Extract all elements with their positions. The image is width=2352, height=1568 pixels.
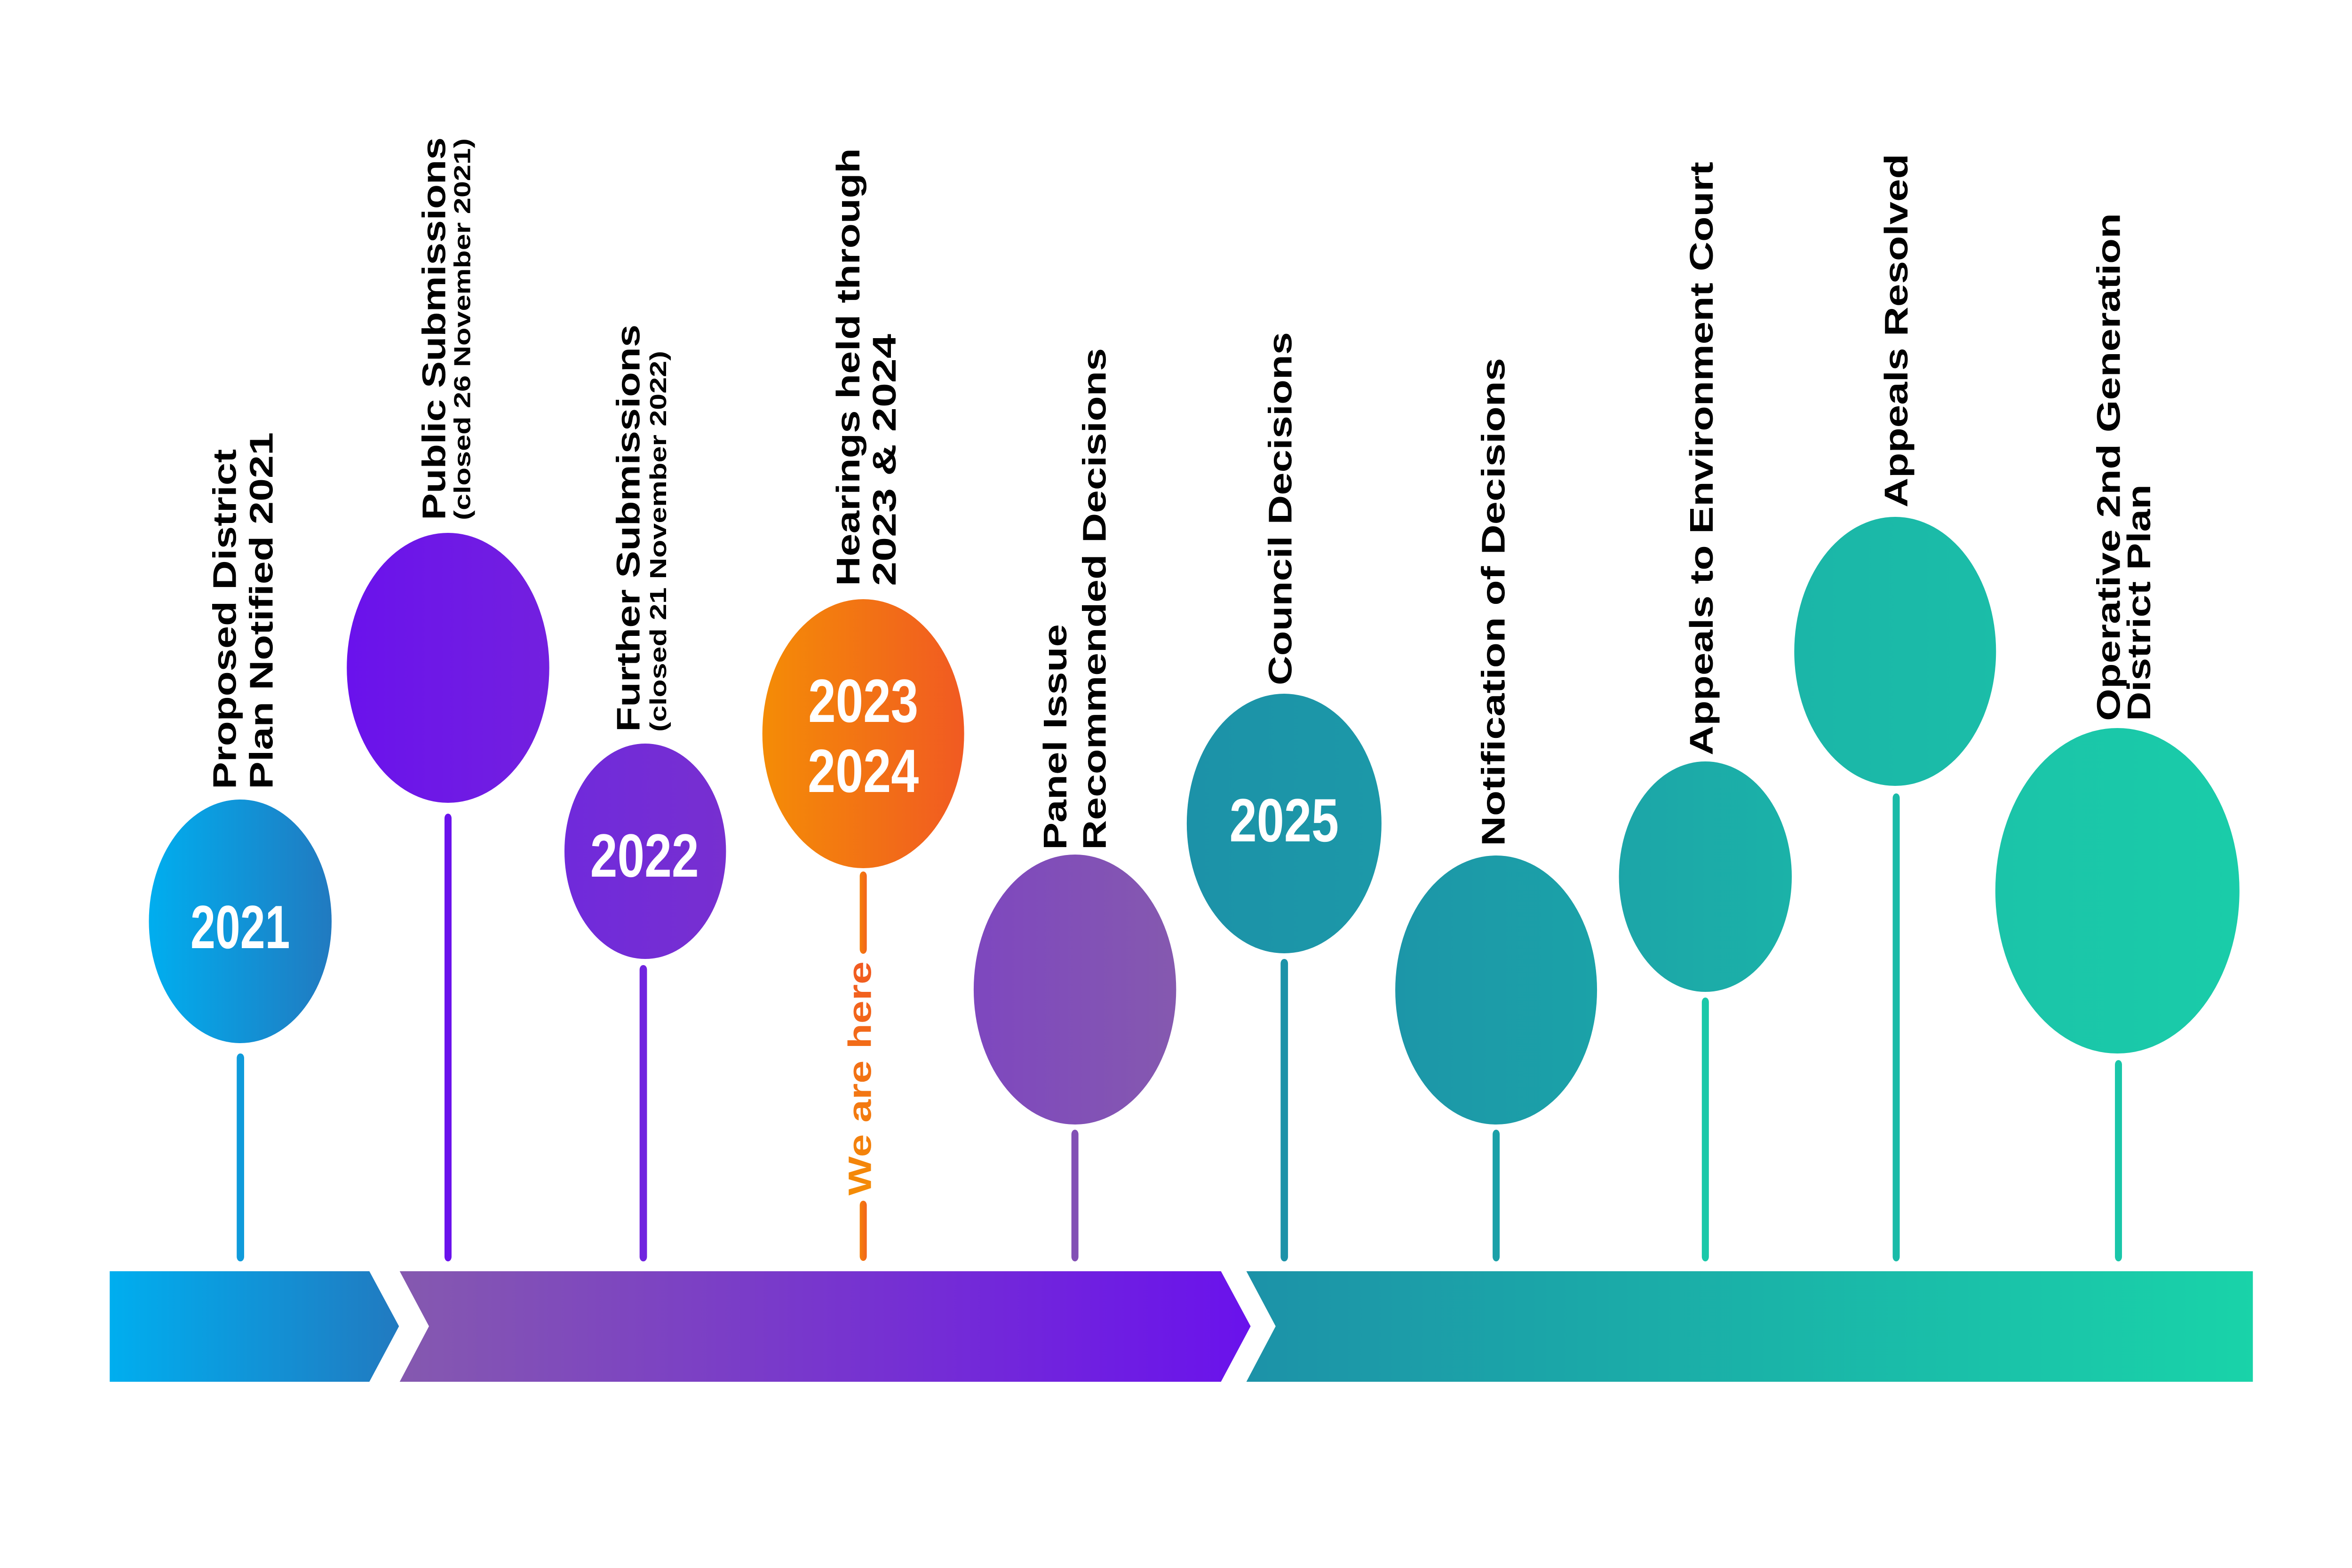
connector xyxy=(445,814,452,1261)
milestone label: Plan Notified 2021 xyxy=(244,432,280,789)
stage arrow: 2025 onward xyxy=(1247,1271,2253,1382)
circle xyxy=(347,533,549,803)
year labels: 2023 xyxy=(808,667,918,735)
milestone label: Further Submissions xyxy=(611,325,647,732)
connector upper xyxy=(860,871,867,954)
connector xyxy=(1702,998,1709,1261)
we are here label: We are here xyxy=(842,961,878,1196)
milestone: Council Decisions xyxy=(1187,332,1382,1261)
milestone label: Council Decisions xyxy=(1263,332,1299,685)
connector lower xyxy=(860,1201,867,1261)
milestone: Appeals Resolved xyxy=(1794,154,1996,1261)
milestone: Appeals to Environment Court xyxy=(1619,162,1792,1261)
milestone label: Appeals to Environment Court xyxy=(1684,162,1720,755)
circle xyxy=(974,855,1176,1125)
connector xyxy=(1893,793,1900,1261)
milestone label: Proposed District xyxy=(207,449,243,789)
year labels xyxy=(808,667,919,805)
stage arrow: 2021 xyxy=(110,1271,399,1382)
milestone: Public Submissions xyxy=(347,137,549,1261)
year label: 2025 xyxy=(1230,786,1339,855)
circle xyxy=(1395,855,1597,1125)
milestone label: District Plan xyxy=(2121,484,2157,721)
milestone label xyxy=(2091,213,2157,721)
milestone label xyxy=(830,148,903,586)
connector xyxy=(237,1053,244,1261)
milestone: Further Submissions xyxy=(564,325,726,1261)
milestone label: Hearings held through xyxy=(830,148,866,586)
milestone: Notification of Decisions xyxy=(1395,358,1597,1261)
milestone label: (closed 21 November 2022) xyxy=(645,351,671,732)
circle xyxy=(763,599,964,868)
milestone: Operative 2nd Generation District Plan xyxy=(1995,213,2240,1261)
connector xyxy=(1072,1130,1079,1261)
milestone label xyxy=(207,432,280,789)
year label: 2022 xyxy=(590,822,699,890)
milestone label: Notification of Decisions xyxy=(1476,358,1512,846)
circle xyxy=(1619,761,1792,992)
year labels: 2024 xyxy=(808,737,919,805)
milestone label: Appeals Resolved xyxy=(1878,154,1915,507)
connector xyxy=(1280,959,1288,1261)
milestone label: Recommended Decisions xyxy=(1076,348,1113,850)
milestone: Hearings xyxy=(763,148,964,1261)
milestone: Panel Issue Recommended Decisions xyxy=(974,348,1176,1261)
circle xyxy=(564,744,726,959)
milestone label xyxy=(611,325,671,732)
circle xyxy=(1794,517,1996,786)
milestone label: Public Submissions xyxy=(416,137,453,520)
milestone label: (closed 26 November 2021) xyxy=(450,138,476,520)
connector xyxy=(640,965,647,1261)
connector xyxy=(1493,1130,1500,1261)
milestone label: Operative 2nd Generation xyxy=(2091,213,2127,721)
milestone label: Panel Issue xyxy=(1037,624,1073,850)
circle xyxy=(1187,694,1382,953)
milestone label xyxy=(416,137,476,520)
year label: 2021 xyxy=(191,893,290,961)
connector xyxy=(2115,1060,2122,1261)
milestone label xyxy=(1037,348,1113,850)
milestone label: 2023 & 2024 xyxy=(866,334,903,586)
milestone: Proposed District Plan Notified 2021 xyxy=(149,432,332,1261)
circle xyxy=(1995,728,2240,1053)
circle xyxy=(149,800,332,1043)
stage arrow: 2021 to 2024 xyxy=(400,1271,1251,1382)
